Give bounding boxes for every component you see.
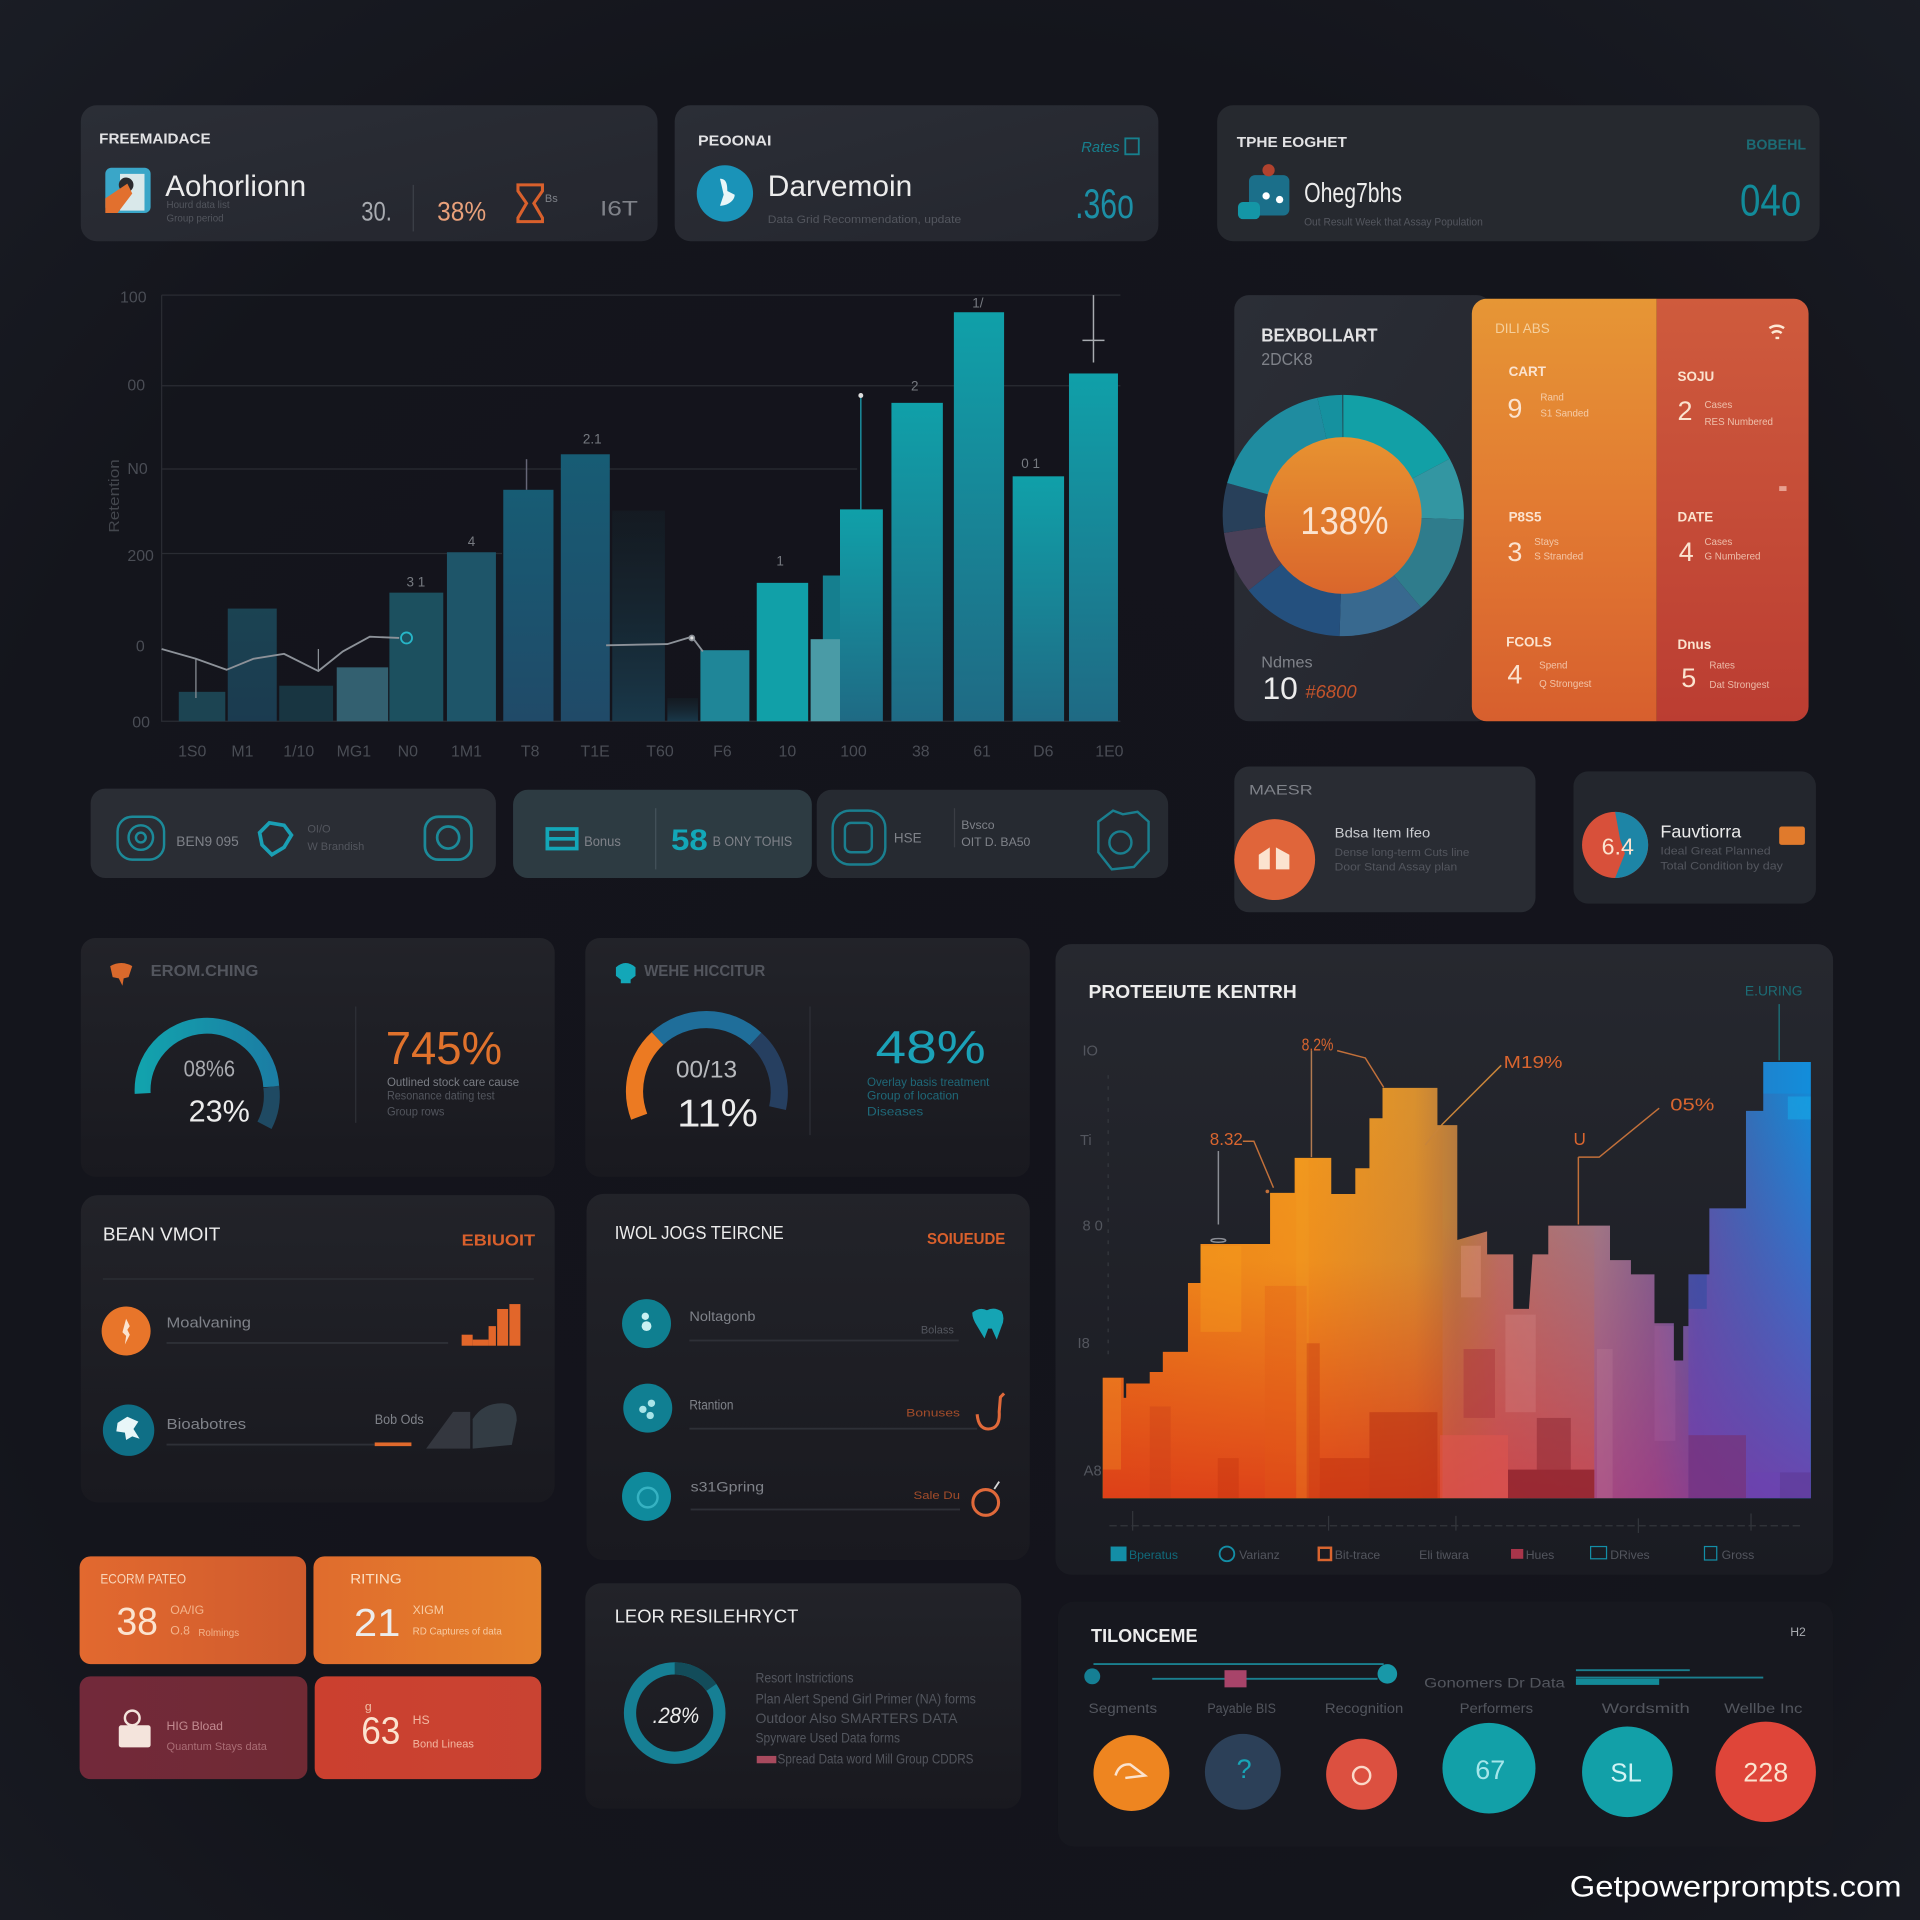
- description: [387, 1075, 519, 1119]
- tile: red stat: [315, 1676, 541, 1779]
- whiskers: [527, 295, 1104, 509]
- metric name: Oheg7bhs: [1304, 177, 1402, 208]
- divider: [655, 808, 656, 869]
- description: [1660, 846, 1783, 872]
- stat: date: DATE: [1678, 510, 1713, 525]
- heading: PROTEEIUTE KENTRH: [1089, 981, 1297, 1002]
- mini bar chart: [462, 1304, 520, 1346]
- stat: sales: SOJU: [1678, 369, 1714, 384]
- slider one: [1084, 1664, 1397, 1687]
- note lines: Resort Instrictions: [756, 1670, 854, 1685]
- stat: cart: 9: [1507, 394, 1522, 424]
- value: 04o: [1740, 177, 1801, 226]
- legend: Varianz: [1239, 1548, 1280, 1562]
- y axis labels: Ti: [1080, 1133, 1092, 1149]
- step labels: Payable BIS: [1207, 1701, 1276, 1716]
- header: DILI ABS: [1495, 321, 1550, 336]
- y axis labels: I8: [1078, 1336, 1090, 1352]
- headline value: 48%: [876, 1021, 986, 1073]
- panel: timeline: [1058, 1602, 1833, 1847]
- divider: [954, 808, 955, 847]
- gauge value: 11%: [677, 1093, 758, 1136]
- stat: date: Cases: [1704, 537, 1732, 548]
- tile heading: RITING: [350, 1571, 402, 1586]
- colour washes: [1103, 1062, 1811, 1498]
- icon: frame: [833, 811, 885, 864]
- legend: Hues: [1526, 1548, 1554, 1562]
- tag: SOIUEUDE: [927, 1231, 1005, 1248]
- faded background bars: [612, 511, 698, 721]
- tile notes: [413, 1713, 474, 1750]
- icon: house badge: [1234, 819, 1315, 900]
- description: Dense long-term Cuts line: [1335, 847, 1469, 859]
- row two progress: [375, 1442, 411, 1446]
- label: BEN9 095: [176, 834, 239, 849]
- tag: BOBEHL: [1746, 137, 1806, 153]
- icon: teal badge: [622, 1299, 671, 1348]
- tile notes: HIG Bload: [167, 1719, 223, 1733]
- step: red: [1326, 1739, 1397, 1810]
- x axis labels: MG1: [337, 744, 371, 761]
- tag: EBIUOIT: [462, 1232, 535, 1249]
- row two line: [167, 1444, 375, 1446]
- gauge label: 00/13: [676, 1057, 737, 1084]
- heading: WEHE HICCITUR: [644, 963, 766, 980]
- right stat: I6T: [600, 198, 638, 221]
- y axis labels: 200: [127, 548, 154, 565]
- total label: Ndmes: [1261, 654, 1313, 671]
- bar value labels: 1/: [972, 295, 984, 310]
- y axis labels: 00: [132, 714, 150, 731]
- metric name: Darvemoin: [768, 170, 912, 203]
- x axis labels: [178, 744, 1124, 761]
- divider: [355, 1007, 356, 1123]
- panel: orange and red stats: [1472, 299, 1809, 721]
- stat: focus: FCOLS: [1506, 635, 1552, 650]
- icon: frame: [425, 817, 471, 860]
- y axis labels: 100: [120, 289, 147, 306]
- icon: cloud: [260, 823, 291, 855]
- heading: TPHE EOGHET: [1237, 135, 1347, 151]
- bar chart: teal retention: [107, 289, 1124, 761]
- tile: amber stat: [313, 1556, 541, 1664]
- note swatch: [757, 1756, 776, 1763]
- icon: signal: [1769, 326, 1784, 338]
- panel: top summary three: [1217, 105, 1820, 241]
- panel: top summary one: [81, 105, 658, 241]
- stat: cart: CART: [1509, 364, 1547, 379]
- grid and axes: [162, 295, 1120, 721]
- row two text: [689, 1397, 977, 1430]
- legend: Eli tiwara: [1419, 1548, 1469, 1562]
- x axis labels: 1M1: [451, 744, 482, 761]
- label stack: [307, 824, 364, 853]
- description: Outlined stock care cause: [387, 1075, 519, 1089]
- callout values: [1210, 1035, 1714, 1149]
- x axis labels: 100: [840, 744, 867, 761]
- stat: deals: Rates: [1709, 661, 1735, 672]
- row one line: [167, 1342, 448, 1344]
- icon: person: [119, 1711, 151, 1747]
- panel: distribution chart: [1056, 944, 1833, 1575]
- panel: gauge one: [81, 938, 555, 1177]
- tile value: 21: [354, 1602, 400, 1645]
- tag: E.URING: [1745, 984, 1802, 999]
- name: Fauvtiorra: [1660, 822, 1742, 842]
- stat: pass: S Stranded: [1534, 552, 1583, 563]
- small stat: Bs: [545, 193, 558, 205]
- stat: sales: Cases: [1704, 400, 1732, 411]
- panel: top summary two: [675, 105, 1158, 241]
- stat: focus: Q Strongest: [1539, 679, 1592, 690]
- metric note: Hourd data list: [167, 200, 230, 211]
- step: teal value: [1442, 1723, 1536, 1813]
- x axis labels: 10: [778, 744, 796, 761]
- stat: pass: P8S5: [1509, 510, 1542, 525]
- label two: B ONY TOHIS: [713, 834, 792, 849]
- metric name: Aohorlionn: [165, 170, 306, 203]
- tile notes: [413, 1603, 502, 1638]
- icon: mask: [110, 963, 132, 986]
- gauge value: 23%: [189, 1095, 250, 1129]
- icon: teal badge: [103, 1404, 154, 1456]
- row one text: Bolass: [921, 1324, 954, 1336]
- y axis dashes: [1107, 1075, 1109, 1359]
- gauge arc: [143, 1026, 272, 1125]
- label stack: W Brandish: [307, 841, 364, 853]
- tile notes: OA/IG: [170, 1603, 204, 1617]
- row three text: [691, 1479, 960, 1510]
- step: navy: ?: [1237, 1754, 1252, 1784]
- small dot: [1779, 486, 1787, 491]
- bar value labels: 1: [776, 554, 784, 569]
- step labels: Wordsmith: [1602, 1701, 1690, 1716]
- divider: [413, 185, 414, 231]
- x axis labels: F6: [713, 744, 732, 761]
- value: 30.: [361, 196, 392, 226]
- stat: cart: S1 Sanded: [1540, 408, 1589, 419]
- description: Total Condition by day: [1660, 860, 1783, 872]
- trend line left: [162, 632, 412, 698]
- heading: LEOR RESILEHRYCT: [615, 1605, 798, 1626]
- row three text: Sale Du: [913, 1490, 960, 1502]
- icon: orange arc: [977, 1393, 1004, 1429]
- y axis labels: N0: [127, 461, 148, 478]
- stat: date: G Numbered: [1704, 552, 1760, 563]
- value: .36o: [1075, 180, 1134, 227]
- step labels: Wellbe Inc: [1724, 1701, 1803, 1716]
- panel: activity list one: [81, 1195, 555, 1502]
- slider two: [1576, 1670, 1763, 1685]
- stat: date: 4: [1679, 537, 1694, 567]
- panel: favourite card: [1573, 771, 1816, 904]
- step: teal value: 67: [1475, 1755, 1505, 1785]
- callout values: 8.32: [1210, 1129, 1243, 1149]
- label stack: OI/O: [307, 824, 331, 836]
- note lines: Spread Data word Mill Group CDDRS: [778, 1751, 973, 1766]
- x axis labels: T60: [646, 744, 674, 761]
- step: red value: 228: [1743, 1758, 1788, 1788]
- value: 58: [671, 824, 708, 857]
- legend: [1111, 1547, 1754, 1562]
- legend: Gross: [1722, 1548, 1754, 1562]
- stat: focus: Spend: [1539, 661, 1567, 672]
- gauge label: 08%6: [184, 1055, 235, 1081]
- panel: profile card: [1234, 767, 1536, 912]
- description: Resonance dating test: [387, 1089, 495, 1103]
- tile notes: RD Captures of data: [413, 1627, 502, 1638]
- heading: EROM.CHING: [151, 963, 258, 980]
- step labels: Performers: [1460, 1701, 1533, 1716]
- y axis labels: 0: [136, 638, 145, 655]
- tile notes: Rolmings: [198, 1628, 239, 1639]
- bar value labels: [407, 295, 1040, 590]
- stat: deals: 5: [1681, 663, 1696, 693]
- watermark: Getpowerprompts.com: [1570, 1871, 1902, 1904]
- icon: tooth: [972, 1309, 1003, 1340]
- bars: [179, 312, 1118, 721]
- stat: focus: [1506, 635, 1592, 690]
- panel: icon strip three: [817, 790, 1168, 878]
- y axis labels: IO: [1082, 1044, 1098, 1060]
- ring chart: [630, 1668, 719, 1758]
- panel: icon strip two: [513, 790, 812, 878]
- callout values: 05%: [1670, 1095, 1714, 1115]
- tile small mark: g: [365, 1700, 372, 1714]
- icon: split badge: [1582, 812, 1648, 878]
- step labels: [1089, 1701, 1803, 1716]
- subheading: 2DCK8: [1261, 349, 1313, 369]
- legend: Bit-trace: [1335, 1548, 1380, 1562]
- heading: IWOL JOGS TEIRCNE: [615, 1222, 784, 1243]
- y axis title: Retention: [107, 459, 123, 533]
- y axis labels: A8: [1084, 1464, 1102, 1480]
- icon: card: [547, 829, 577, 849]
- icon: teal badge three: [622, 1472, 671, 1521]
- step: navy: [1205, 1734, 1281, 1810]
- ring value: .28%: [653, 1703, 699, 1728]
- description: Diseases: [867, 1105, 923, 1119]
- icon: helmet: [616, 963, 636, 983]
- row two text: Rtantion: [689, 1397, 733, 1412]
- x axis labels: D6: [1033, 744, 1054, 761]
- gauge arc: [635, 1020, 779, 1117]
- bar value labels: 0 1: [1021, 456, 1040, 471]
- x axis labels: 38: [912, 744, 930, 761]
- stat: cart: Rand: [1540, 392, 1564, 403]
- x axis labels: 1/10: [283, 744, 314, 761]
- step: teal value two: [1582, 1727, 1673, 1817]
- icon: folders: [1238, 164, 1289, 219]
- x axis labels: N0: [398, 744, 418, 761]
- tile value: 63: [361, 1711, 400, 1753]
- tile notes: [167, 1719, 268, 1753]
- icon: hourglass: [518, 185, 542, 222]
- panel: donut summary: [1234, 295, 1491, 721]
- y axis labels: [120, 289, 154, 731]
- callouts: [1211, 1004, 1779, 1242]
- tile heading: ECORM PATEO: [100, 1571, 186, 1586]
- panel: activity list two: [587, 1194, 1030, 1560]
- row two tag: Bob Ods: [375, 1412, 424, 1427]
- icon: teal badge two: [623, 1384, 672, 1433]
- stat: sales: [1678, 369, 1773, 428]
- tag: Rates: [1081, 140, 1120, 156]
- x axis labels: 61: [973, 744, 991, 761]
- note lines: [756, 1670, 976, 1766]
- legend: DRives: [1610, 1548, 1650, 1562]
- icon: target: [118, 817, 164, 860]
- stat: deals: Dat Strongest: [1709, 680, 1769, 691]
- name: Bdsa Item Ifeo: [1335, 826, 1430, 841]
- description: Overlay basis treatment: [867, 1075, 990, 1089]
- step: teal value two: SL: [1610, 1760, 1642, 1788]
- heading: MAESR: [1249, 783, 1313, 798]
- metric note: Out Result Week that Assay Population: [1304, 216, 1483, 228]
- heading: PEOONAI: [698, 134, 771, 150]
- x axis labels: T1E: [581, 744, 610, 761]
- tile: maroon stat: [80, 1676, 307, 1779]
- tile notes: HS: [413, 1713, 430, 1727]
- step: red value: [1716, 1722, 1816, 1822]
- heading: BEAN VMOIT: [103, 1223, 220, 1244]
- tile notes: O.8: [170, 1624, 190, 1638]
- stat: deals: Dnus: [1678, 637, 1711, 652]
- trend line right: [606, 636, 703, 651]
- stat: sales: 2: [1678, 396, 1693, 426]
- tile notes: Quantum Stays data: [167, 1741, 268, 1753]
- stat: pass: Stays: [1534, 537, 1559, 548]
- x axis labels: T8: [521, 744, 540, 761]
- stat: focus: 4: [1507, 659, 1522, 689]
- stat: cart: [1507, 364, 1589, 424]
- y axis labels: 00: [127, 378, 145, 395]
- callout values: M19%: [1504, 1052, 1562, 1072]
- stat: pass: [1507, 510, 1583, 567]
- stat: pass: 3: [1507, 537, 1522, 567]
- bar value labels: 2: [911, 379, 919, 394]
- donut value: 138%: [1300, 500, 1389, 543]
- note lines: Spyrware Used Data forms: [756, 1730, 900, 1745]
- heading: TILONCEME: [1091, 1625, 1198, 1646]
- callout values: 8.2%: [1302, 1035, 1333, 1055]
- label: HSE: [894, 830, 922, 845]
- label stack: [961, 818, 1031, 849]
- panel: gauge two: [585, 938, 1030, 1177]
- divider: [809, 1007, 811, 1135]
- label stack: OIT D. BA50: [961, 835, 1031, 849]
- heading: FREEMAIDACE: [99, 131, 211, 147]
- x axis labels: 1S0: [178, 744, 207, 761]
- description: [867, 1075, 990, 1119]
- x axis labels: 1E0: [1095, 744, 1124, 761]
- metric note: Data Grid Recommendation, update: [768, 214, 961, 226]
- divider: [103, 1278, 534, 1280]
- description: [1335, 847, 1469, 874]
- donut chart: [1244, 416, 1442, 615]
- bar value labels: 3 1: [407, 575, 425, 590]
- total tag: #6800: [1305, 681, 1358, 702]
- description: Group of location: [867, 1089, 959, 1103]
- grey shapes: [426, 1403, 517, 1449]
- icon: orange ring: [973, 1482, 999, 1515]
- y axis labels: [1078, 1044, 1103, 1480]
- tile: orange stat: [80, 1556, 306, 1664]
- icon: shield: [1098, 811, 1149, 869]
- y axis labels: 8 0: [1082, 1219, 1103, 1235]
- x axis labels: M1: [231, 744, 254, 761]
- description: Door Stand Assay plan: [1335, 862, 1457, 874]
- metric note two: Group period: [167, 214, 224, 225]
- note lines: Outdoor Also SMARTERS DATA: [756, 1711, 958, 1726]
- row one text: Noltagonb: [689, 1309, 756, 1324]
- x axis: [1109, 1511, 1800, 1533]
- stepped area chart: [1103, 1062, 1811, 1498]
- heading: BEXBOLLART: [1261, 325, 1378, 346]
- panel: icon strip one: [91, 789, 496, 878]
- step labels: Segments: [1089, 1701, 1157, 1716]
- row two text: Bonuses: [906, 1408, 961, 1420]
- donut centre: [1265, 437, 1422, 594]
- orange value: 38%: [437, 196, 486, 226]
- bar value labels: 2.1: [583, 431, 602, 446]
- icon: split badge: 6.4: [1602, 834, 1634, 860]
- step: orange: [1093, 1735, 1169, 1811]
- description: Group rows: [387, 1105, 444, 1119]
- bar value labels: 4: [468, 534, 476, 549]
- slider caption: Gonomers Dr Data: [1424, 1675, 1566, 1690]
- tag icon: [1125, 138, 1139, 154]
- total value: 10: [1262, 670, 1298, 706]
- tile notes: [170, 1603, 239, 1639]
- tile notes: Bond Lineas: [413, 1738, 474, 1750]
- stat: date: [1678, 510, 1760, 567]
- row three text: s31Gpring: [691, 1479, 764, 1494]
- label stack: Bvsco: [961, 818, 995, 832]
- callout values: U: [1573, 1129, 1586, 1149]
- label: Bonus: [584, 834, 621, 849]
- icon: app tile: [105, 168, 151, 213]
- step labels: Recognition: [1325, 1701, 1403, 1716]
- row one text: [689, 1309, 959, 1341]
- stat: deals: [1678, 637, 1769, 693]
- description: Ideal Great Planned: [1660, 846, 1771, 858]
- legend: Bperatus: [1129, 1548, 1178, 1562]
- icon: badge: [697, 165, 753, 222]
- stat: sales: RES Numbered: [1704, 417, 1773, 428]
- panel: resilience note: [585, 1583, 1021, 1809]
- tag: [1779, 827, 1805, 845]
- headline value: 745%: [386, 1022, 502, 1074]
- corner mark: H2: [1790, 1625, 1806, 1639]
- tile notes: XIGM: [413, 1603, 444, 1617]
- tile value: 38: [116, 1601, 158, 1644]
- row two label: Bioabotres: [167, 1417, 246, 1433]
- red column: [1657, 299, 1809, 721]
- row one label: Moalvaning: [167, 1315, 251, 1331]
- icon: orange badge: [102, 1307, 151, 1356]
- note lines: Plan Alert Spend Girl Primer (NA) forms: [756, 1691, 976, 1706]
